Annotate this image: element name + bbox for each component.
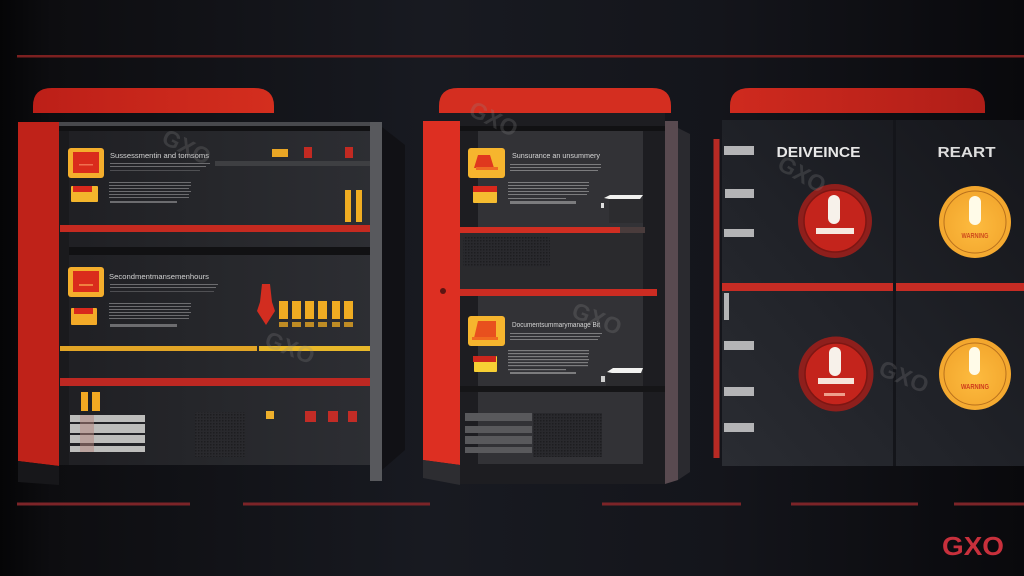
shelf bars (460, 227, 620, 233)
row one text lines (508, 164, 601, 204)
right post and side (665, 121, 690, 484)
row one yellow bars (345, 190, 362, 222)
row one small icon (71, 186, 98, 202)
mesh vent (195, 412, 245, 457)
column heading right: REART (938, 145, 996, 161)
row one status chips (272, 147, 353, 158)
yellow bar chart (279, 301, 353, 327)
panel: middle cabinet (423, 88, 690, 485)
middle cabinet body (460, 113, 665, 484)
column divider (893, 120, 896, 466)
cabinet side shadow (382, 127, 405, 470)
right post (370, 122, 382, 481)
header tab right (730, 88, 985, 113)
white shelf note lower (601, 368, 643, 386)
row two text lines (508, 333, 602, 374)
icon: yellow alert top: WARNING (962, 233, 989, 240)
row two small icon (473, 356, 497, 372)
shelf bars (60, 225, 370, 232)
red door (423, 121, 460, 465)
icon: yellow alert top (939, 186, 1011, 258)
mesh vent top (463, 237, 550, 267)
bottom yellow bars (81, 392, 100, 411)
bottom dashed rule (17, 502, 1024, 506)
row one icon (468, 148, 505, 178)
bottom stripes (70, 415, 145, 452)
white shelf note (601, 195, 643, 223)
header tab middle (439, 88, 671, 113)
side tabs (724, 146, 754, 432)
watermarks: GXO (261, 326, 319, 369)
row two icon (468, 316, 505, 346)
watermarks: GXO (568, 297, 626, 340)
row one small icon (473, 186, 497, 203)
watermarks: GXO (773, 150, 831, 198)
icon: yellow alert bottom: WARNING (961, 384, 989, 391)
watermarks: GXO (158, 124, 215, 170)
horizontal red bar (722, 283, 1024, 291)
panel: left cabinet (18, 88, 405, 485)
header tab left (33, 88, 274, 113)
logo: GXO (942, 531, 1004, 561)
cabinet body (59, 122, 371, 465)
row one text lines (109, 163, 210, 203)
row two heading: Documentsummarymanage Bit (512, 320, 601, 329)
bottom stripes (465, 413, 532, 453)
watermarks (158, 96, 933, 398)
door handle (440, 288, 446, 294)
row two text lines (109, 284, 218, 327)
row one heading: Sussessmentin and tomsoms (110, 151, 209, 160)
left red rail (714, 139, 720, 458)
row one heading: Sunsurance an unsummery (512, 151, 600, 160)
watermarks: GXO (875, 355, 933, 398)
red door (18, 122, 59, 466)
red marker (257, 284, 275, 325)
icon: red alert bottom (798, 336, 874, 412)
mesh vent lower (533, 413, 602, 457)
top rule (17, 55, 1024, 58)
icon: yellow alert bottom (939, 338, 1011, 410)
row one icon (68, 148, 104, 178)
icon: red alert top (798, 184, 872, 258)
row two heading: Secondmentmansemenhours (109, 272, 209, 281)
row two icon (68, 267, 104, 297)
row two small icon (71, 308, 97, 325)
panel: right comparison (714, 88, 1024, 466)
column heading left: DEIVEINCE (776, 145, 861, 161)
watermarks: GXO (465, 96, 522, 142)
bottom status chips (266, 411, 357, 422)
comparison body (722, 120, 1024, 466)
